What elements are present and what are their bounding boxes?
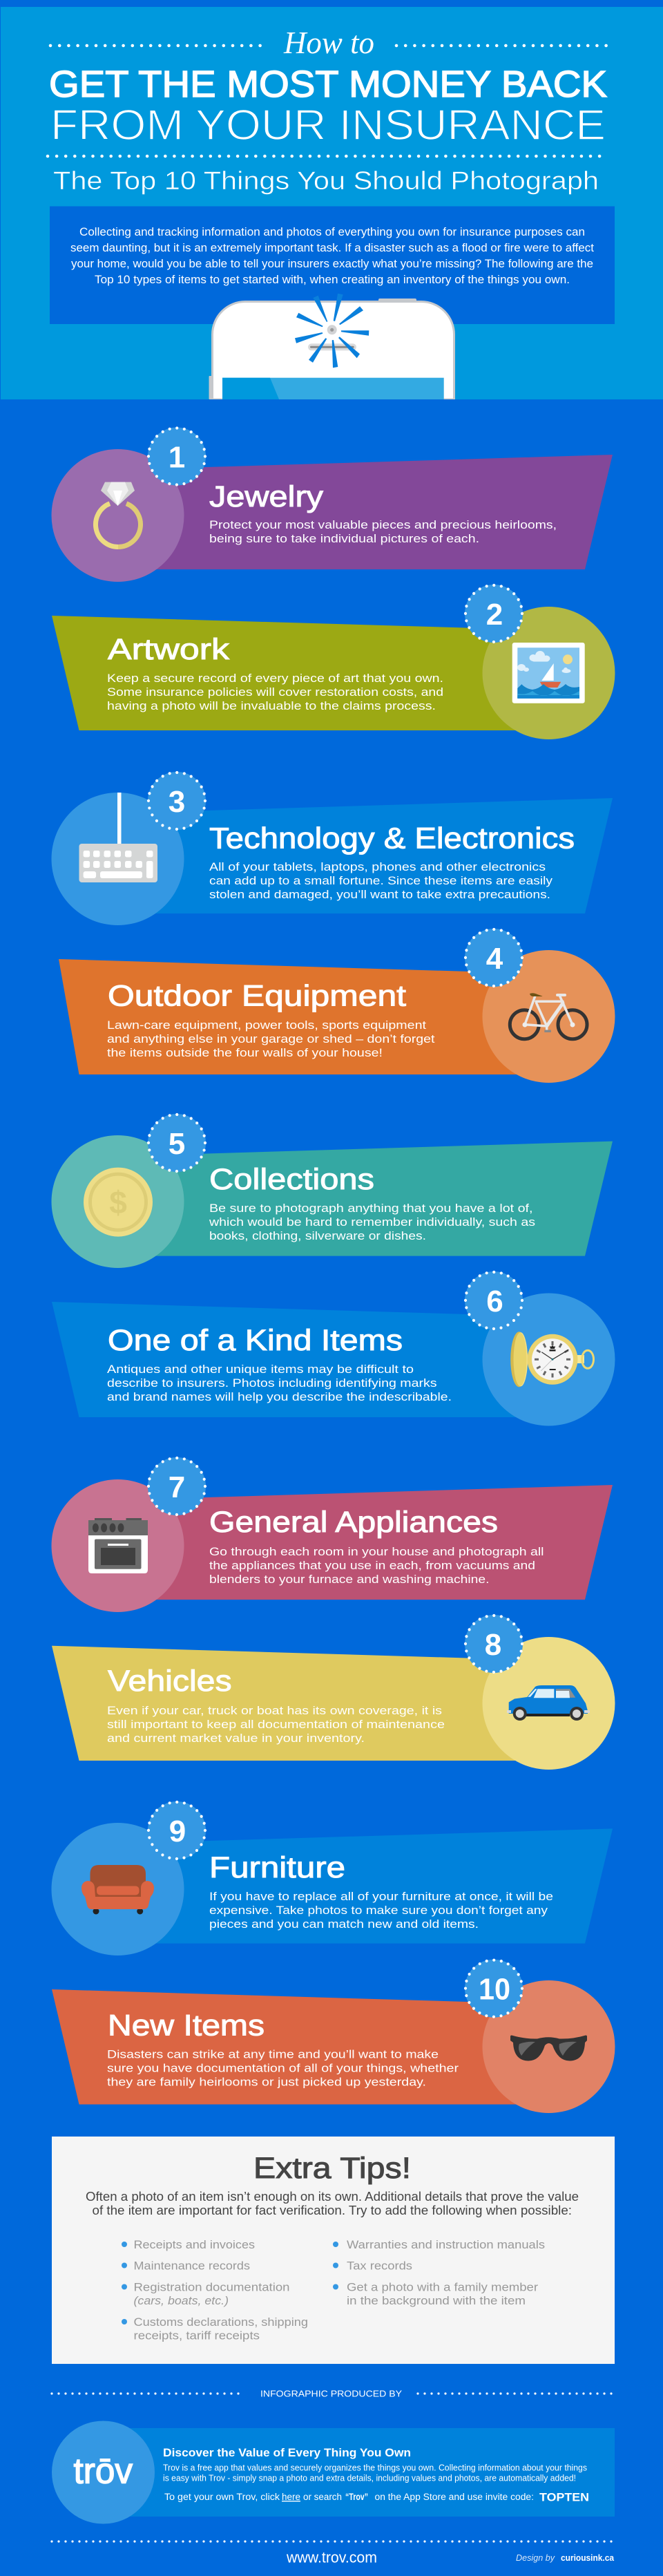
website: www.trov.com	[286, 2548, 377, 2566]
description: new items: they are family heirlooms or just picked up yesterday.	[107, 2076, 426, 2088]
number badge 1	[148, 427, 206, 485]
description: new items: sure you have documentation of all of your things, whether	[107, 2063, 459, 2075]
description: technology: All of your tablets, laptops, phones and other electronics	[209, 861, 546, 873]
tips list: right column: Tax records	[347, 2260, 412, 2272]
description: vehicles: Even if your car, truck or boat has its own coverage, it is	[107, 1705, 442, 1717]
tips list: left column: (cars, boats, etc.)	[134, 2294, 229, 2307]
panel: 8 vehicles	[52, 1615, 615, 1770]
tips intro text: Often a photo of an item isn’t enough on its own. Additional details that prove the value	[86, 2190, 579, 2204]
description: one of a kind: describe to insurers. Photos including identifying marks	[107, 1377, 437, 1390]
panel: 5 collections	[51, 1114, 613, 1268]
number badge 7	[148, 1457, 206, 1515]
heading: technology and electronics: Technology & Electronics	[209, 822, 575, 855]
description: technology: can add up to a small fortune. Since these items are easily	[209, 875, 553, 887]
tips list: left column	[122, 2238, 308, 2342]
icon: diamond ring	[96, 482, 140, 547]
tips list: right column: Get a photo with a family member	[347, 2280, 538, 2294]
title line two: FROM YOUR INSURANCE	[50, 101, 606, 149]
icon: armchair	[81, 1865, 154, 1914]
tips list: left column: Maintenance records	[134, 2260, 250, 2272]
icon: bicycle	[510, 993, 587, 1039]
panel: trov promo	[52, 2421, 615, 2523]
heading: general appliances: General Appliances	[209, 1506, 498, 1539]
description: one of a kind: and brand names will help you describe the indescribable.	[107, 1391, 452, 1403]
tips list: left column: receipts, tariff receipts	[134, 2329, 260, 2342]
panel: 7 general appliances	[51, 1457, 613, 1612]
number badge 6	[465, 1271, 523, 1329]
number badge 8: 8	[485, 1628, 501, 1662]
description: one of a kind	[107, 1363, 452, 1403]
icon: pocket watch	[510, 1332, 594, 1387]
heading: how to: How to	[283, 25, 374, 60]
icon: coin: $	[109, 1184, 127, 1220]
heading: collections: Collections	[209, 1163, 374, 1196]
heading: artwork: Artwork	[108, 633, 230, 666]
tips list: left column: Registration documentation	[134, 2280, 290, 2294]
number badge 2	[465, 585, 523, 643]
number badge 4: 4	[486, 942, 503, 976]
promo text: Trov is a free app that values and securely organizes the things you own. Collecting information about your things	[163, 2463, 587, 2472]
number badge 9: 9	[169, 1815, 186, 1848]
description: furniture: If you have to replace all of your furniture at once, it will be	[209, 1891, 553, 1903]
promo call to action: or search	[303, 2492, 342, 2502]
icon: oven	[88, 1518, 148, 1573]
tips intro text	[86, 2190, 579, 2217]
number badge 3: 3	[169, 785, 185, 819]
panel: 10 new items	[52, 1960, 615, 2113]
icon: sunglasses	[510, 2036, 587, 2061]
description: outdoor: the items outside the four walls of your house!	[107, 1047, 383, 1059]
intro panel: seem daunting, but it is an extremely important task. If a disaster such as a flood or fire were to affect	[70, 242, 594, 254]
intro panel: Top 10 types of items to get started with, when creating an inventory of the things you own.	[95, 274, 570, 286]
header panel	[1, 7, 663, 399]
promo call to action	[164, 2490, 589, 2504]
design credit: curiousink.ca	[561, 2553, 615, 2563]
number badge 10: 10	[479, 1973, 510, 2007]
description: outdoor: and anything else in your garage or shed – don’t forget	[107, 1033, 435, 1045]
description: collections: books, clothing, silverware or dishes.	[209, 1230, 426, 1242]
description: furniture	[209, 1891, 553, 1931]
heading: outdoor equipment: Outdoor Equipment	[108, 980, 406, 1013]
heading: extra tips: Extra Tips!	[253, 2152, 411, 2185]
panel: extra tips	[52, 2137, 615, 2364]
design credit	[516, 2553, 615, 2563]
description: appliances: Go through each room in your house and photograph all	[209, 1546, 544, 1558]
subtitle: The Top 10 Things You Should Photograph	[53, 167, 599, 195]
panel: 1 jewelry	[51, 427, 613, 582]
description: new items	[107, 2049, 459, 2088]
icon: coin	[84, 1168, 153, 1237]
tips list: left column: Receipts and invoices	[134, 2238, 255, 2251]
promo call to action: To get your own Trov, click	[164, 2492, 280, 2502]
promo text: is easy with Trov - simply snap a photo and extra details, including values and photos, are automatically added!	[163, 2474, 576, 2483]
panel: 9 furniture	[51, 1801, 613, 1955]
description: furniture: expensive. Take photos to make sure you don’t forget any	[209, 1904, 548, 1917]
number badge 7: 7	[169, 1470, 185, 1504]
description: outdoor: Lawn-care equipment, power tools, sports equipment	[107, 1019, 426, 1032]
description: jewelry: Protect your most valuable pieces and precious heirlooms,	[209, 519, 557, 531]
tips list: right column	[333, 2238, 545, 2307]
number badge 5	[148, 1114, 206, 1172]
heading: jewelry: Jewelry	[209, 480, 324, 513]
description: jewelry	[209, 519, 557, 545]
panel: 3 technology and electronics	[51, 772, 613, 925]
promo call to action: TOPTEN	[539, 2490, 589, 2504]
icon: keyboard	[79, 793, 157, 882]
description: new items: Disasters can strike at any time and you’ll want to make	[107, 2049, 439, 2061]
heading: furniture: Furniture	[209, 1851, 345, 1884]
description: artwork	[107, 672, 443, 712]
icon: car	[507, 1685, 590, 1721]
infographic produced by divider: INFOGRAPHIC PRODUCED BY	[260, 2389, 403, 2399]
promo call to action: on the App Store and use invite code:	[374, 2492, 534, 2502]
description: collections	[209, 1202, 535, 1242]
trov logo: trōv	[73, 2452, 133, 2492]
description: collections: Be sure to photograph anything that you have a lot of,	[209, 1202, 533, 1215]
description: appliances: the appliances that you use in each, from vacuums and	[209, 1560, 535, 1572]
footer	[52, 2541, 615, 2566]
intro panel: Collecting and tracking information and photos of everything you own for insurance purposes can	[79, 226, 585, 238]
panel: 4 outdoor equipment	[59, 929, 615, 1083]
description: appliances: blenders to your furnace and washing machine.	[209, 1573, 489, 1586]
description: vehicles: still important to keep all documentation of maintenance	[107, 1718, 445, 1731]
description: jewelry: being sure to take individual pictures of each.	[209, 533, 479, 545]
description: one of a kind: Antiques and other unique items may be difficult to	[107, 1363, 414, 1376]
title line one: GET THE MOST MONEY BACK	[49, 64, 607, 105]
intro panel: your home, would you be able to tell your insurers exactly what you’re missing? The following are the	[71, 258, 593, 270]
description: technology: stolen and damaged, you’ll want to take extra precautions.	[209, 889, 550, 901]
icon: framed painting	[512, 643, 585, 703]
description: vehicles	[107, 1705, 445, 1745]
tips list: right column: Warranties and instruction manuals	[347, 2238, 545, 2251]
tips list: right column: in the background with the item	[347, 2294, 526, 2307]
design credit: Design by	[516, 2553, 555, 2563]
description: appliances	[209, 1546, 544, 1586]
heading: new items: New Items	[108, 2009, 265, 2043]
description: technology	[209, 861, 553, 901]
number badge 6: 6	[486, 1285, 503, 1318]
description: furniture: pieces and you can match new and old items.	[209, 1918, 479, 1931]
number badge 4	[465, 929, 523, 987]
description: collections: which would be hard to remember individually, such as	[209, 1216, 535, 1229]
tips intro text: of the item are important for fact verification. Try to add the following when possible:	[93, 2204, 572, 2217]
number badge 8	[465, 1615, 523, 1673]
tips list: left column: Customs declarations, shipping	[134, 2315, 308, 2329]
panel: 6 one of a kind items	[52, 1271, 615, 1426]
heading: vehicles: Vehicles	[108, 1665, 232, 1698]
description: outdoor	[107, 1019, 435, 1059]
heading: one of a kind items: One of a Kind Items	[108, 1324, 403, 1357]
description: artwork: Keep a secure record of every piece of art that you own.	[107, 672, 443, 685]
promo text	[163, 2463, 587, 2483]
description: artwork: having a photo will be invaluable to the claims process.	[107, 700, 436, 712]
number badge 9	[148, 1801, 206, 1859]
panel: 2 artwork	[52, 585, 615, 739]
description: vehicles: and current market value in your inventory.	[107, 1732, 365, 1745]
intro panel	[50, 206, 615, 324]
icon: phone with camera flash	[209, 294, 454, 399]
promo heading: Discover the Value of Every Thing You Own	[163, 2446, 411, 2459]
number badge 5: 5	[169, 1127, 185, 1161]
number badge 10	[465, 1960, 523, 2018]
number badge 1: 1	[169, 441, 185, 474]
description: artwork: Some insurance policies will cover restoration costs, and	[107, 686, 443, 699]
number badge 2: 2	[486, 598, 503, 632]
promo call to action: “Trov”	[345, 2492, 368, 2502]
number badge 3	[148, 772, 206, 830]
promo call to action: here	[282, 2492, 300, 2502]
